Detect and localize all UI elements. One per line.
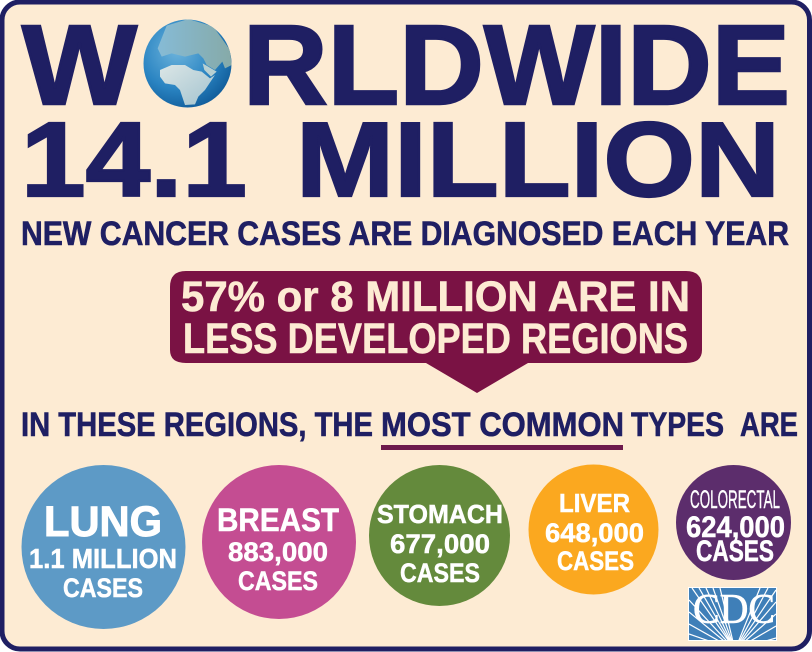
circle: colorectal: CASES (696, 535, 774, 568)
circle: stomach: 677,000 (390, 529, 490, 559)
subheading text most common: MOST COMMON (381, 406, 624, 444)
subheading text are: ARE (740, 406, 798, 444)
circle: lung: 1.1 MILLION (29, 543, 177, 574)
icon: CDC logo: CDC (693, 587, 775, 633)
circle: stomach (369, 465, 510, 606)
circle: breast: BREAST (217, 502, 339, 538)
circle: breast (202, 465, 356, 619)
headline number: 14.1 (21, 101, 247, 219)
subheading text types: TYPES (631, 406, 724, 444)
circle: liver: CASES (557, 546, 634, 576)
circle: liver: LIVER (559, 488, 630, 518)
circle: liver: 648,000 (545, 518, 644, 548)
headline word: MILLION (296, 101, 780, 219)
title: worldwide with globe (20, 20, 787, 108)
circle: colorectal (676, 465, 791, 580)
callout line one: 57% or 8 MILLION ARE IN (181, 273, 690, 321)
icon: globe (144, 19, 232, 107)
circle: stomach: STOMACH (377, 499, 503, 529)
callout: less developed regions (170, 271, 702, 393)
callout line two: LESS DEVELOPED REGIONS (183, 315, 688, 363)
circle: stomach: CASES (400, 558, 480, 588)
underline (381, 445, 623, 450)
circle: colorectal: 624,000 (686, 511, 785, 544)
circle: lung: LUNG (44, 498, 162, 546)
circle: lung: CASES (63, 573, 143, 603)
subheading text part one: IN THESE REGIONS, THE (21, 406, 373, 444)
headline: 14.1 million (21, 101, 780, 219)
title letter W: W (22, 2, 137, 128)
circle: liver (528, 464, 658, 594)
circle: lung (22, 465, 186, 629)
circle: breast: CASES (238, 566, 318, 596)
callout shape with pointer (170, 271, 702, 393)
circle: breast: 883,000 (228, 537, 328, 567)
subheading: most common types (21, 406, 798, 450)
title letters RLDWIDE: RLDWIDE (243, 2, 790, 128)
